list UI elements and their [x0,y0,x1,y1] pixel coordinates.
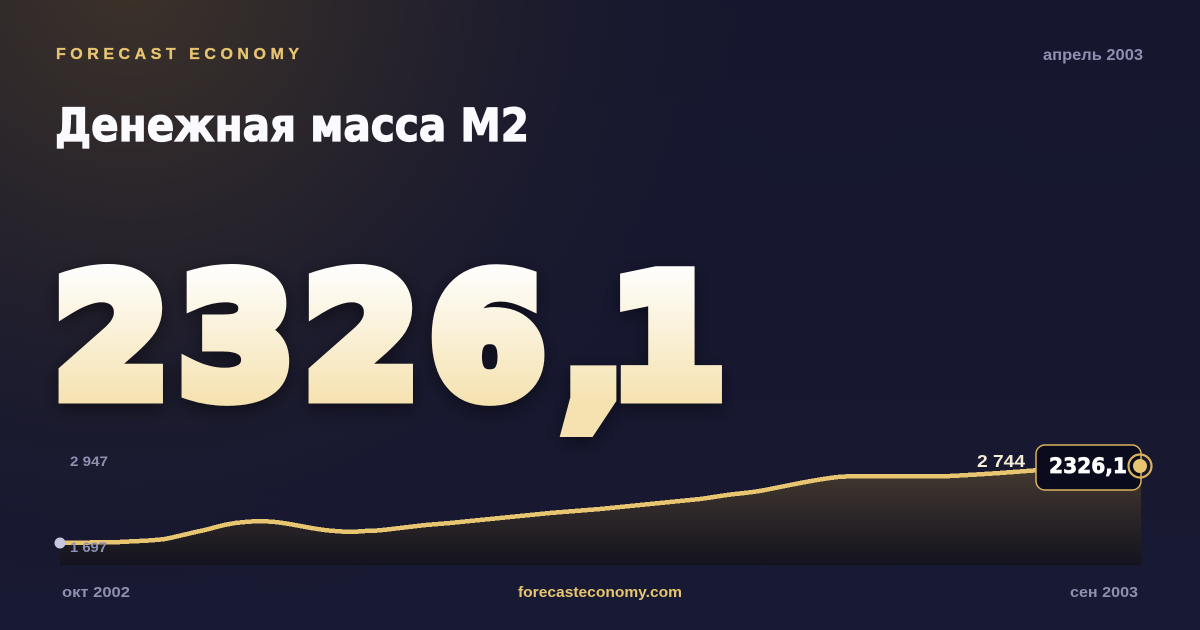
chart line [60,470,1040,543]
area chart [60,470,1141,565]
website: forecasteconomy.com [518,584,682,601]
big value: 2326,1 [54,242,725,444]
peak label: 2 744 [977,451,1025,471]
current point marker [1128,454,1152,478]
axis max label: 2 947 [70,453,108,469]
current value callout: 2326,1 [1049,454,1127,478]
title: Денежная масса М2 [55,99,529,152]
start date: окт 2002 [62,584,130,601]
end date: сен 2003 [1070,584,1138,601]
start point [54,538,66,548]
chart area fill [60,470,1141,565]
date: апрель 2003 [1043,47,1143,64]
brand label: FORECAST ECONOMY [56,46,299,63]
axis min label: 1 697 [70,539,107,555]
current value callout [1036,445,1141,490]
